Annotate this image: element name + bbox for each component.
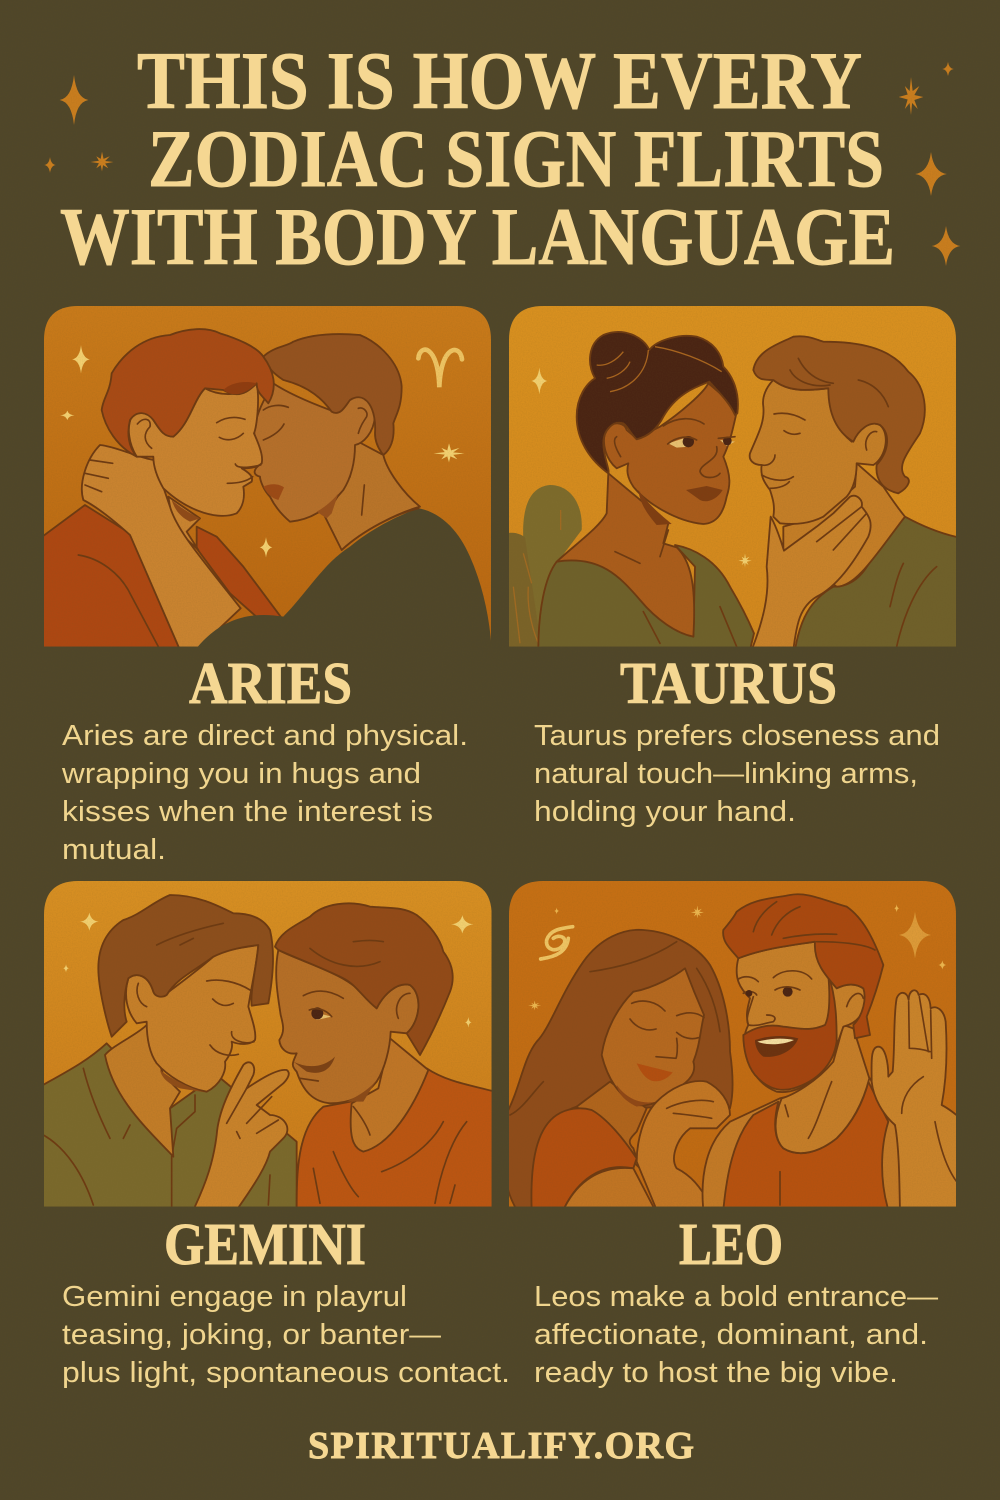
man's olive shirt (795, 517, 958, 650)
left man's olive shirt (40, 1043, 297, 1210)
panel: gemini illustration (40, 881, 495, 1210)
text: gemini description (62, 1281, 510, 1389)
man's neck (783, 463, 905, 587)
woman's long hair (507, 930, 732, 1210)
woman's red top (531, 1108, 637, 1210)
heading: gemini: GEMINI (164, 1211, 366, 1277)
panel: leo illustration (507, 881, 960, 1212)
woman's dark hair and bun (577, 332, 738, 473)
man's waving hand and arm (872, 990, 960, 1212)
man's hair (753, 336, 925, 493)
text: gemini description: plus light, spontaneous contact. (62, 1357, 510, 1389)
text: taurus description (534, 720, 940, 828)
embracing arm and hand (82, 445, 241, 650)
sparkles (60, 345, 464, 558)
title: THIS IS HOW EVERY (137, 35, 862, 126)
left man's hair (98, 895, 273, 1037)
left man's red shirt (40, 505, 281, 650)
man's face (737, 942, 866, 1092)
man's torso (703, 1078, 900, 1210)
woman's clasped hands (637, 1081, 730, 1210)
text: aries description: Aries are direct and physical. (62, 720, 468, 752)
sparkles (528, 904, 946, 1010)
right man's hair (275, 903, 453, 1055)
panel: aries illustration (40, 306, 492, 650)
text: aries description: wrapping you in hugs and (61, 758, 421, 790)
text: taurus description: holding your hand. (534, 796, 796, 828)
text: aries description (61, 720, 468, 866)
heading: leo: LEO (679, 1211, 783, 1277)
man's face (750, 380, 886, 524)
icon: aries symbol (418, 350, 462, 387)
woman's face (604, 383, 736, 524)
decorative stars around title (44, 62, 960, 266)
raised hand (193, 1062, 289, 1210)
heading: aries: ARIES (189, 650, 352, 716)
woman's neck (577, 1082, 647, 1168)
left man's neck (105, 1025, 180, 1157)
man's beard (743, 975, 837, 1090)
text: gemini description: teasing, joking, or banter— (62, 1319, 441, 1351)
man's red hair (723, 894, 883, 1038)
right man's face (254, 383, 375, 522)
left man's collar and neck (168, 497, 200, 550)
text: gemini description: Gemini engage in playrul (62, 1281, 407, 1313)
sparkles (63, 912, 474, 1028)
text: leo description: Leos make a bold entrance— (534, 1281, 938, 1313)
right man's neck (351, 1038, 428, 1152)
woman's face (602, 968, 704, 1105)
man's hand on neck (752, 496, 871, 650)
panel: taurus illustration (507, 306, 958, 650)
right man's hair (263, 334, 402, 455)
title (60, 35, 895, 282)
woman's neck and chest (557, 473, 694, 637)
man's neck (776, 1025, 869, 1153)
text: leo description (534, 1281, 938, 1389)
text: aries description: mutual. (62, 834, 166, 866)
right man's face (276, 950, 418, 1103)
text: aries description: kisses when the interest is (62, 796, 433, 828)
right man's orange shirt (297, 1068, 495, 1210)
woman's arm (563, 1168, 655, 1210)
heading: taurus: TAURUS (620, 650, 837, 716)
sparkles (531, 368, 752, 567)
man's red tank top (723, 1082, 888, 1210)
left man's face (129, 383, 262, 516)
right man's neck (325, 440, 420, 550)
title: ZODIAC SIGN FLIRTS (148, 113, 884, 204)
text: leo description: affectionate, dominant, and. (534, 1319, 928, 1351)
text: taurus description: natural touch—linking arms, (534, 758, 918, 790)
text: taurus description: Taurus prefers closeness and (534, 720, 940, 752)
left man's face (126, 945, 258, 1092)
icon: leo symbol (541, 927, 573, 959)
left man's hair (102, 329, 274, 457)
footer: website name: SPIRITUALIFY.ORG (308, 1425, 694, 1467)
text: leo description: ready to host the big vibe. (534, 1357, 898, 1389)
cactus shapes (507, 485, 582, 650)
right man's olive shirt (195, 508, 492, 650)
woman's olive top (538, 545, 754, 650)
